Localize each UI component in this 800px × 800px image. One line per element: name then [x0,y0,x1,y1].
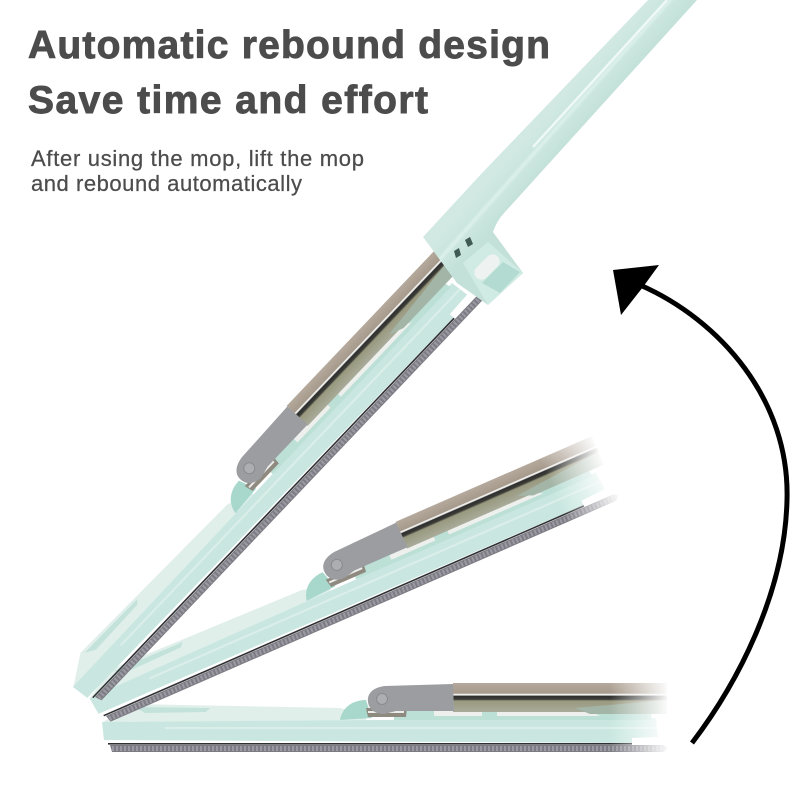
mop head: middle position [74,436,620,726]
mop head: lowest position [102,683,668,752]
description text [31,146,364,196]
mop head: raised position [45,250,485,708]
description text: and rebound automatically [31,171,302,196]
title: Automatic rebound design [28,24,550,67]
title [28,24,550,122]
title: Save time and effort [28,79,428,122]
curved arrow [613,265,787,743]
mop handle and bracket [423,0,697,305]
description text: After using the mop, lift the mop [31,146,364,171]
